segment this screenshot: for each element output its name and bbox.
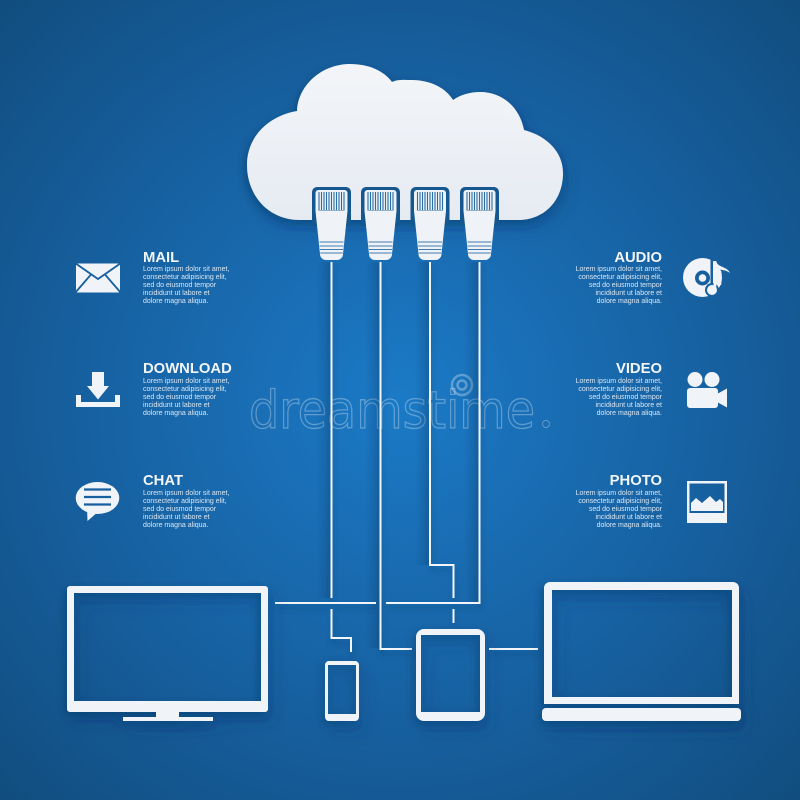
- text: video: dolore magna aliqua.: [597, 410, 662, 417]
- wire 4 to laptop bus: [386, 262, 480, 603]
- device: desktop monitor: [67, 586, 268, 721]
- wire 2 to tablet: [380, 262, 412, 649]
- watermark text: dreamstime: [249, 381, 535, 441]
- text: chat: Lorem ipsum dolor sit amet,: [143, 490, 229, 497]
- text: audio: Lorem ipsum dolor sit amet,: [576, 266, 662, 273]
- text: photo: Lorem ipsum dolor sit amet,: [576, 490, 662, 497]
- wire 3 to tablet: [430, 262, 454, 623]
- icon: mail: [75, 263, 121, 293]
- text: mail: MAIL: [143, 250, 179, 266]
- device: smartphone: [325, 661, 359, 721]
- text: photo: consectetur adipisicing elit,: [578, 498, 662, 505]
- icon: chat: [76, 482, 119, 521]
- plug 2: [361, 187, 400, 260]
- icon: video camera: [687, 372, 727, 408]
- text: video: sed do eiusmod tempor: [589, 394, 663, 401]
- text: audio: consectetur adipisicing elit,: [578, 274, 662, 281]
- text: audio: sed do eiusmod tempor: [589, 282, 663, 289]
- text: download: DOWNLOAD: [143, 361, 232, 377]
- watermark spiral: [452, 375, 472, 395]
- text: mail: incididunt ut labore et: [143, 290, 210, 297]
- wire shadows: [316, 262, 479, 648]
- text: download: Lorem ipsum dolor sit amet,: [143, 378, 229, 385]
- watermark registered mark: [542, 420, 550, 428]
- text: audio: incididunt ut labore et: [595, 290, 662, 297]
- text: video: VIDEO: [616, 361, 662, 377]
- text: photo: dolore magna aliqua.: [597, 522, 662, 529]
- device: tablet: [416, 629, 485, 721]
- text: chat: dolore magna aliqua.: [143, 522, 208, 529]
- text: download: sed do eiusmod tempor: [143, 394, 217, 401]
- text: mail: sed do eiusmod tempor: [143, 282, 217, 289]
- cloud with network plugs: [247, 64, 563, 260]
- text: mail: [143, 250, 229, 305]
- text: video: [576, 361, 663, 417]
- horizontal link from monitor: [275, 602, 376, 604]
- text: audio: dolore magna aliqua.: [597, 298, 662, 305]
- plug 1: [312, 187, 351, 260]
- text: chat: incididunt ut labore et: [143, 514, 210, 521]
- text: download: consectetur adipisicing elit,: [143, 386, 227, 393]
- text: download: dolore magna aliqua.: [143, 410, 208, 417]
- plug 3: [410, 187, 450, 260]
- text: video: Lorem ipsum dolor sit amet,: [576, 378, 662, 385]
- text: photo: incididunt ut labore et: [595, 514, 662, 521]
- text: photo: sed do eiusmod tempor: [589, 506, 663, 513]
- text: mail: consectetur adipisicing elit,: [143, 274, 227, 281]
- plug 4: [460, 187, 499, 260]
- link from tablet to laptop: [489, 648, 538, 650]
- text: download: [143, 361, 232, 417]
- icon: download: [76, 372, 120, 407]
- watermark: [249, 375, 550, 441]
- icon: photo: [687, 481, 727, 523]
- icon: audio: [683, 258, 730, 297]
- connecting wires: [275, 262, 538, 652]
- text: mail: Lorem ipsum dolor sit amet,: [143, 266, 229, 273]
- text: photo: [576, 473, 663, 529]
- text: video: consectetur adipisicing elit,: [578, 386, 662, 393]
- text: chat: CHAT: [143, 473, 183, 489]
- text: chat: [143, 473, 229, 529]
- text: audio: [576, 250, 663, 305]
- text: download: incididunt ut labore et: [143, 402, 210, 409]
- device: laptop: [542, 582, 741, 721]
- text: chat: sed do eiusmod tempor: [143, 506, 217, 513]
- text: mail: dolore magna aliqua.: [143, 298, 208, 305]
- text: video: incididunt ut labore et: [595, 402, 662, 409]
- cloud: [247, 64, 563, 220]
- text: photo: PHOTO: [610, 473, 662, 489]
- wire 1 to phone: [332, 262, 351, 652]
- text: chat: consectetur adipisicing elit,: [143, 498, 227, 505]
- text: audio: AUDIO: [614, 250, 662, 266]
